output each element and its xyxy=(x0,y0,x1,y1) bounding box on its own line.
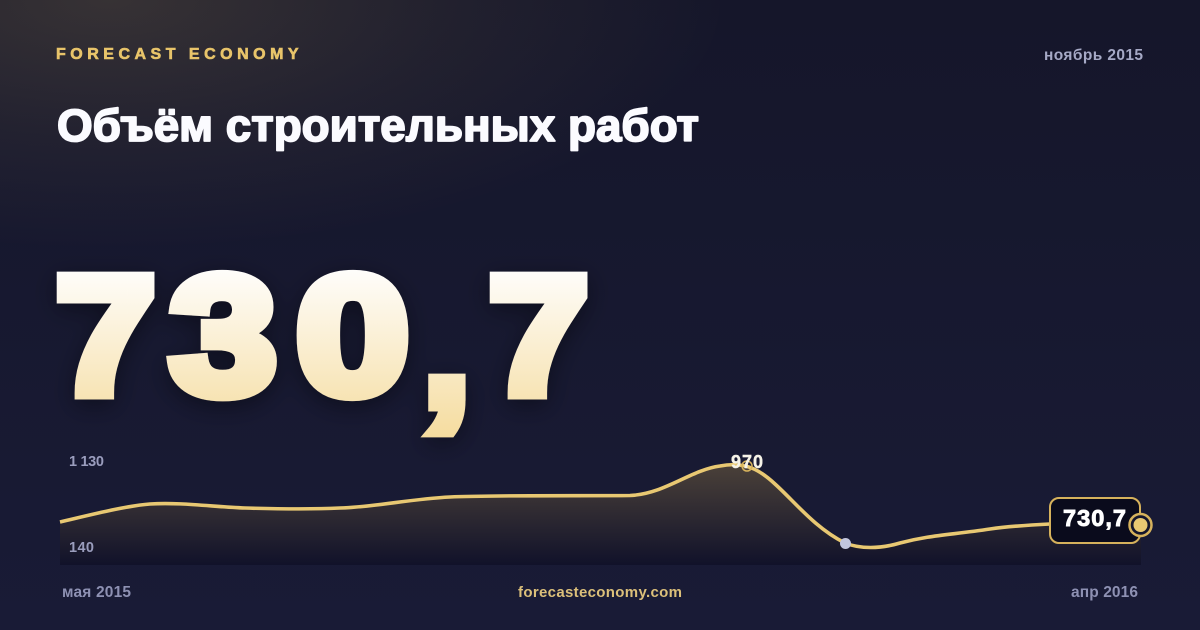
hero value xyxy=(56,241,588,441)
chart area fill xyxy=(60,465,1141,565)
brand label: FORECAST ECONOMY xyxy=(56,46,303,63)
hero value: , xyxy=(423,254,470,441)
source link: forecasteconomy.com xyxy=(518,584,682,601)
min marker xyxy=(840,538,851,549)
hero value: 7 xyxy=(56,241,155,429)
y axis max label: 1 130 xyxy=(69,454,104,470)
max label: 970 xyxy=(731,452,763,472)
hero value: 3 xyxy=(170,242,276,429)
current value callout: 730,7 xyxy=(1063,505,1126,531)
current value marker xyxy=(1130,514,1152,536)
hero value: 7 xyxy=(489,241,588,429)
hero value: 0 xyxy=(296,243,409,429)
x axis end label: апр 2016 xyxy=(1071,584,1138,601)
title: Объём строительных работ xyxy=(57,100,699,151)
area chart xyxy=(60,452,1152,565)
max marker xyxy=(742,461,752,471)
y axis min label: 140 xyxy=(69,540,94,556)
chart line xyxy=(60,465,1050,548)
current value callout xyxy=(1050,498,1140,543)
x axis start label: мая 2015 xyxy=(62,584,131,601)
date label: ноябрь 2015 xyxy=(1044,47,1143,64)
